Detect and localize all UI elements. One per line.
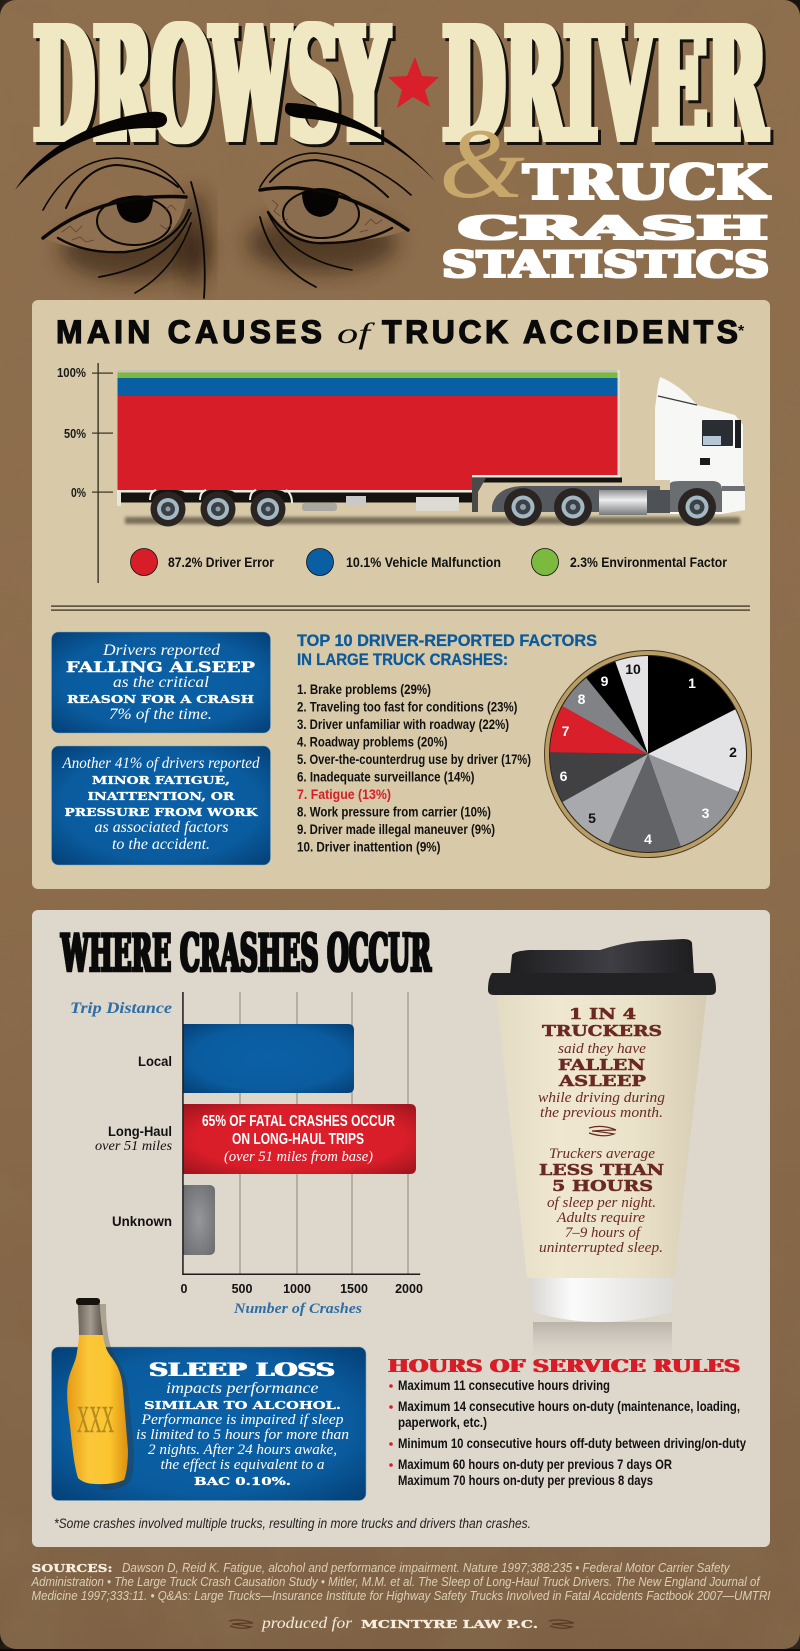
credit: produced for McIntyre Law: produced for <box>261 1615 353 1632</box>
bar: long-haul: 65% OF FATAL CRASHES OCCUR <box>202 1113 395 1130</box>
callout: sleep loss: impacts performance <box>166 1380 318 1397</box>
list: hours of service rules: paperwork, etc.) <box>398 1414 487 1430</box>
trailer wheels <box>150 492 286 526</box>
bar chart <box>70 992 423 1317</box>
subtitle: ampersand: & <box>439 108 525 219</box>
pie chart: 2 <box>729 744 737 760</box>
cup text: 1 IN 4 <box>569 1005 636 1023</box>
icon: beer bottle <box>67 1298 134 1490</box>
axis labels <box>70 1000 423 1317</box>
legend <box>130 548 727 576</box>
cup text: of sleep per night. <box>547 1195 656 1211</box>
pie chart: 4 <box>644 831 652 847</box>
legend: environmental factor <box>532 548 727 576</box>
list: hours of service rules: Maximum 11 consecutive hours driving <box>398 1377 610 1393</box>
callout: sleep loss: Performance is impaired if sleep <box>140 1412 344 1428</box>
sources <box>31 1560 771 1603</box>
cup lid <box>488 939 716 995</box>
callout: minor fatigue: Another 41% of drivers reported <box>62 755 260 772</box>
credit: produced for McIntyre Law <box>229 1615 574 1632</box>
cup text: ASLEEP <box>558 1072 646 1090</box>
list: hours of service rules: Maximum 60 hours on-duty per previous 7 days OR <box>398 1456 672 1472</box>
tractor wheels <box>504 488 716 526</box>
callout: falling asleep: as the critical <box>113 674 210 691</box>
pie chart: 9 <box>601 673 609 689</box>
subtitle: truck crash statistics <box>442 155 771 286</box>
pie chart: 10 <box>625 661 641 677</box>
axis labels: 0 <box>181 1282 188 1296</box>
axis labels: Long-Haul <box>108 1123 172 1139</box>
list: hours of service rules: Maximum 70 hours on-duty per previous 8 days <box>398 1472 653 1488</box>
sources: Dawson D, Reid K. Fatigue, alcohol and performance impairment. Nature 1997;388:235 • Federal Motor Carrier Safety <box>122 1560 731 1575</box>
pie chart <box>544 650 752 858</box>
divider <box>51 606 750 611</box>
axis labels: 1500 <box>340 1282 368 1296</box>
cup text: TRUCKERS <box>542 1022 662 1040</box>
callout: falling asleep: FALLING ALSEEP <box>66 660 256 676</box>
subtitle: truck crash statistics: TRUCK <box>523 155 771 211</box>
list: hours of service rules <box>389 1377 746 1488</box>
icon: beer bottle: XXX <box>77 1399 114 1441</box>
list: top 10 factors: 1. Brake problems (29%) <box>297 681 431 697</box>
cup text: said they have <box>558 1041 646 1057</box>
cup text: FALLEN <box>558 1056 645 1074</box>
icon: flourish <box>589 1126 616 1136</box>
left eye <box>43 158 191 293</box>
cup text: the previous month. <box>540 1105 663 1121</box>
pie chart: 5 <box>588 810 596 826</box>
axis labels: Local <box>138 1053 172 1069</box>
cup text: while driving during <box>538 1090 666 1106</box>
axis labels: Trip Distance <box>70 1000 172 1017</box>
callout: minor fatigue: PRESSURE FROM WORK <box>64 805 259 819</box>
list: top 10 factors: 4. Roadway problems (20%) <box>297 734 448 750</box>
cup body <box>496 993 707 1278</box>
heading: main causes of truck accidents: of <box>337 317 375 350</box>
heading: top 10 factors <box>297 632 597 669</box>
axis labels: 500 <box>232 1282 252 1296</box>
callout: minor fatigue <box>52 746 270 865</box>
callout: falling asleep: REASON FOR A CRASH <box>67 692 254 706</box>
list: top 10 factors: 6. Inadequate surveillance (14%) <box>297 768 474 784</box>
pie chart: 7 <box>562 723 570 739</box>
trailer chassis <box>117 475 622 512</box>
chart axis: 0% <box>71 486 86 500</box>
credit: produced for McIntyre Law: MCINTYRE LAW P.C. <box>361 1617 538 1631</box>
legend: vehicle malfunction: 10.1% Vehicle Malfunction <box>346 554 501 570</box>
bar: long-haul <box>183 1104 416 1174</box>
axis labels: Number of Crashes <box>233 1301 362 1317</box>
panel: main causes <box>32 300 770 889</box>
bar: unknown <box>183 1185 215 1255</box>
nose line <box>191 182 205 298</box>
bar: local <box>183 1024 354 1093</box>
axis labels: 2000 <box>395 1282 423 1296</box>
bar: long-haul: (over 51 miles from base) <box>224 1149 373 1165</box>
pie chart: 1 <box>688 675 696 691</box>
pie chart: 6 <box>560 768 568 784</box>
callout: sleep loss: SIMILAR TO ALCOHOL. <box>144 1398 341 1412</box>
trailer: stacked percentage bands <box>117 370 620 490</box>
sources: SOURCES: <box>32 1561 112 1575</box>
list: top 10 factors: 2. Traveling too fast for conditions (23%) <box>297 698 518 714</box>
cup text <box>538 1005 666 1256</box>
truck stacked chart <box>117 370 745 526</box>
list: top 10 factors: 10. Driver inattention (9%) <box>297 838 440 854</box>
axis labels: 1000 <box>283 1282 311 1296</box>
pie chart: 3 <box>702 805 710 821</box>
right eye <box>260 153 411 287</box>
axis labels: over 51 miles <box>95 1138 172 1153</box>
coffee cup <box>488 939 716 1364</box>
heading: hours of service rules: HOURS OF SERVICE RULES <box>388 1356 740 1377</box>
chart axis <box>57 363 113 583</box>
heading: main causes of truck accidents: MAIN CAUSES <box>56 314 322 350</box>
list: top 10 factors: 3. Driver unfamiliar with roadway (22%) <box>297 716 509 732</box>
cup reflection <box>533 1322 672 1364</box>
eyebrows <box>15 103 436 190</box>
callout: minor fatigue: MINOR FATIGUE, <box>92 773 230 787</box>
callout: falling asleep <box>52 632 270 733</box>
subtitle: truck crash statistics: CRASH <box>458 209 768 247</box>
heading: top 10 factors: IN LARGE TRUCK CRASHES: <box>297 651 508 669</box>
legend: driver error: 87.2% Driver Error <box>168 554 274 570</box>
callout: minor fatigue: to the accident. <box>112 836 210 853</box>
callout: sleep loss: is limited to 5 hours for more than <box>136 1427 349 1443</box>
callout: falling asleep: Drivers reported <box>102 642 221 659</box>
callout: sleep loss: the effect is equivalent to a <box>160 1457 324 1473</box>
heading: where crashes occur: WHERE CRASHES OCCUR <box>61 924 431 984</box>
cup text: Adults require <box>556 1210 645 1226</box>
legend: driver error <box>130 548 274 576</box>
axis labels: Unknown <box>112 1213 172 1229</box>
cup text: 5 HOURS <box>552 1177 653 1195</box>
footnote: *Some crashes involved multiple trucks, resulting in more trucks and drivers than crashes. <box>54 1516 531 1531</box>
legend: vehicle malfunction <box>306 548 501 576</box>
callout: sleep loss: BAC 0.10%. <box>194 1474 291 1488</box>
panel: where crashes occur <box>32 910 770 1547</box>
cup text: LESS THAN <box>539 1161 664 1179</box>
list: top 10 factors <box>297 681 531 854</box>
list: top 10 factors: 7. Fatigue (13%) <box>297 786 391 802</box>
chart axis: 50% <box>64 427 86 441</box>
cup text: uninterrupted sleep. <box>539 1240 663 1256</box>
cup text: Truckers average <box>549 1146 655 1162</box>
icon: red star <box>388 57 439 108</box>
legend: environmental factor: 2.3% Environmental Factor <box>570 554 727 570</box>
bar: long-haul: ON LONG-HAUL TRIPS <box>232 1131 364 1148</box>
list: top 10 factors: 9. Driver made illegal maneuver (9%) <box>297 821 495 837</box>
callout: sleep loss <box>52 1347 366 1500</box>
cup base <box>529 1275 674 1322</box>
list: top 10 factors: 5. Over-the-counterdrug use by driver (17%) <box>297 751 531 767</box>
callout: falling asleep: 7% of the time. <box>109 706 212 723</box>
callout: minor fatigue: INATTENTION, OR <box>88 789 235 803</box>
ground shadow <box>125 517 740 524</box>
callout: sleep loss: 2 nights. After 24 hours awake, <box>148 1442 337 1458</box>
callout: sleep loss: SLEEP LOSS <box>149 1359 335 1381</box>
heading: main causes of truck accidents <box>56 314 745 350</box>
heading: top 10 factors: TOP 10 DRIVER-REPORTED FACTORS <box>297 632 597 650</box>
subtitle: truck crash statistics: STATISTICS <box>442 244 769 286</box>
list: top 10 factors: 8. Work pressure from carrier (10%) <box>297 804 491 820</box>
heading: main causes of truck accidents: TRUCK ACCIDENTS <box>382 314 738 350</box>
tractor cab <box>492 377 745 515</box>
eyes illustration <box>43 153 411 298</box>
cup text: 7–9 hours of <box>565 1225 642 1241</box>
pie chart: 8 <box>578 691 586 707</box>
heading: main causes of truck accidents: * <box>738 323 745 340</box>
chart axis: 100% <box>57 366 86 380</box>
callout: minor fatigue: as associated factors <box>94 819 228 836</box>
